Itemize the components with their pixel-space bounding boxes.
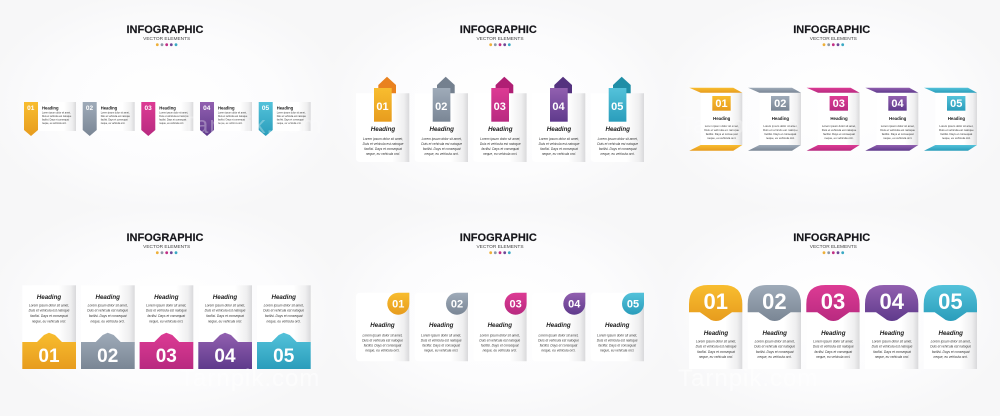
step 03: Heading [488,126,513,133]
step 02: Lorem ipsum dolor sit amet, [101,112,130,114]
step 05: Duis et vehicula est natoque [597,142,638,146]
step 05: neque, eu vehicula orci. [934,355,968,359]
step 04: neque, eu vehicula orci. [875,355,909,359]
watermarks: Tarnpik.com [680,112,820,139]
step 04: Duis et vehicula est natoque [218,115,248,118]
step 02: neque, eu vehicula orci. [101,122,126,125]
step 03: Lorem ipsum dolor sit amet, [146,304,187,308]
panel 1 title [126,24,204,46]
step 03: facilisi. Days et consequat [481,344,520,348]
step 03: facilisi. Days et consequat [159,118,187,122]
step 02: 02 [451,298,463,310]
watermarks: Tarnpik.com [180,365,320,392]
step 03: facilisi. Days et consequat [823,132,855,136]
step 04: facilisi. Days et consequat [540,147,579,151]
step 03: facilisi. Days et consequat [482,147,520,151]
step 04: 04 [552,101,565,113]
step 02 [415,293,468,361]
step 01: Duis et vehicula est natoque [704,128,739,132]
step 03: Duis et vehicula est natoque [813,344,854,348]
step 04: Heading [880,330,904,337]
step 01: facilisi. Days et consequat [706,132,738,136]
step 01: Lorem ipsum dolor sit amet, [362,334,403,338]
step 02: 02 [86,105,93,112]
step 04: facilisi. Days et consequat [206,314,245,318]
step 01: neque, eu vehicula orci. [366,152,400,156]
step 05: Heading [948,116,965,121]
step 04: neque, eu vehicula orci. [541,348,576,352]
step 05: facilisi. Days et consequat [932,350,971,354]
step 05 [257,285,311,369]
step 05 [591,77,644,162]
step 03: Lorem ipsum dolor sit amet, [159,112,188,114]
step 03: facilisi. Days et consequat [148,314,186,318]
step 03: Lorem ipsum dolor sit amet, [822,124,856,128]
step 05: 05 [611,101,623,113]
step 02 [83,102,135,136]
step 03: 03 [833,98,845,110]
step 02: facilisi. Days et consequat [423,147,462,151]
step 04: Heading [546,322,571,329]
step 04: Lorem ipsum dolor sit amet, [539,137,579,141]
step 03: 03 [821,289,845,314]
step 02: Duis et vehicula est natoque [421,142,462,146]
step 03: neque, eu vehicula orci. [149,319,184,323]
step 01 [356,77,409,162]
step 04: facilisi. Days et consequat [882,132,914,136]
watermarks [180,112,820,392]
step 05: facilisi. Days et consequat [277,118,304,122]
step 03 [473,293,527,361]
step 01: Lorem ipsum dolor sit amet, [696,340,736,344]
step 05: Heading [938,330,963,337]
step 01: neque, eu vehicula orci. [699,355,733,359]
step 04: Heading [213,294,237,301]
step 01: Lorem ipsum dolor sit amet, [705,124,739,128]
step 01: Heading [704,330,728,337]
step 03: Duis et vehicula est natoque [146,309,187,313]
step 02: Lorem ipsum dolor sit amet, [88,304,128,308]
step 03: 03 [509,298,522,310]
step 01 [24,102,76,136]
step 05: Lorem ipsum dolor sit amet, [597,334,637,338]
step 05: Heading [277,106,294,110]
step 03: 03 [144,105,152,112]
step 01: Heading [371,126,395,133]
step 01: facilisi. Days et consequat [364,344,402,348]
step 05: Heading [605,126,630,133]
step 02: Duis et vehicula est natoque [421,338,462,342]
step 01: 01 [703,289,728,314]
step 02: Heading [429,322,454,329]
step 01: Heading [713,116,731,121]
panel 5 title: INFOGRAPHIC [460,232,537,244]
step 03: neque, eu vehicula orci. [816,355,851,359]
panel: corner teardrops [356,232,644,361]
step 03: Heading [830,116,848,121]
step 04: 04 [879,289,905,314]
step 05: facilisi. Days et consequat [941,132,973,136]
step 03: Lorem ipsum dolor sit amet, [813,340,854,344]
step 02: Heading [762,330,787,337]
step 05 [259,102,311,136]
step 02: Heading [101,106,118,110]
step 05: facilisi. Days et consequat [598,344,637,348]
step 03: Duis et vehicula est natoque [159,115,189,118]
step 05: Duis et vehicula est natoque [597,338,638,342]
step 01: Lorem ipsum dolor sit amet, [42,112,71,114]
step 05: neque, eu vehicula orci. [267,319,301,323]
step 01: 01 [376,101,389,113]
step 03: 03 [494,101,506,113]
step 04: 04 [214,346,236,367]
step 02 [415,77,468,162]
panel 2 title: VECTOR ELEMENTS [476,36,524,42]
step 05: Heading [605,322,630,329]
step 03: Heading [159,106,176,110]
step 04: Lorem ipsum dolor sit amet, [205,304,245,308]
step 01: facilisi. Days et consequat [364,147,403,151]
step 05: Duis et vehicula est natoque [277,115,307,118]
step 02: neque, eu vehicula orci. [758,355,792,359]
step 04: facilisi. Days et consequat [540,344,578,348]
step 05: Lorem ipsum dolor sit amet, [264,304,304,308]
step 04: Duis et vehicula est natoque [880,128,915,132]
panel: arrow tabs [356,24,644,162]
step 05: 05 [627,298,639,310]
step 04: Lorem ipsum dolor sit amet, [872,340,912,344]
step 01: 01 [27,105,35,112]
step 05: 05 [938,289,963,314]
panel: domed headers [689,232,977,369]
step 05 [924,88,977,151]
step 03 [473,77,527,162]
step 02: 02 [97,346,118,367]
step 01: facilisi. Days et consequat [30,314,69,318]
step 05: Duis et vehicula est natoque [939,128,974,132]
step 01: facilisi. Days et consequat [42,118,69,122]
step 03: Lorem ipsum dolor sit amet, [480,137,521,141]
step 02: neque, eu vehicula orci. [424,348,458,352]
step 01: Lorem ipsum dolor sit amet, [29,304,69,308]
panel: bookmark tabs [24,24,311,136]
step 02: Duis et vehicula est natoque [754,344,795,348]
step 04: Lorem ipsum dolor sit amet, [218,112,247,114]
step 02: facilisi. Days et consequat [756,350,795,354]
step 04: Duis et vehicula est natoque [872,344,913,348]
step 04: Lorem ipsum dolor sit amet, [881,124,915,128]
step 02: Duis et vehicula est natoque [101,115,131,118]
step 05: Duis et vehicula est natoque [263,309,304,313]
step 05: Duis et vehicula est natoque [930,344,971,348]
step 03: neque, eu vehicula orci. [483,348,517,352]
step 04: Duis et vehicula est natoque [538,338,579,342]
panel 5 title: VECTOR ELEMENTS [476,244,524,250]
step 02: Lorem ipsum dolor sit amet, [422,137,462,141]
panel 2 title [460,24,537,46]
step 03: neque, eu vehicula orci. [483,152,518,156]
step 02: 02 [435,101,447,113]
step 03 [807,88,860,151]
step 05: Lorem ipsum dolor sit amet, [939,124,974,128]
step 03: Lorem ipsum dolor sit amet, [480,334,520,338]
step 05: neque, eu vehicula orci. [277,122,302,125]
step 01: Duis et vehicula est natoque [362,338,403,342]
step 04: Heading [547,126,571,133]
step 04 [198,285,252,369]
step 05: Lorem ipsum dolor sit amet, [931,340,971,344]
step 02: 02 [774,98,786,110]
step 05: 05 [950,98,962,110]
step 05: Lorem ipsum dolor sit amet, [598,137,638,141]
step 02: Lorem ipsum dolor sit amet, [421,334,461,338]
panel 1 title: VECTOR ELEMENTS [143,36,190,42]
step 01: 01 [392,298,404,310]
step 05: neque, eu vehicula orci. [601,152,635,156]
step 02: Heading [429,126,454,133]
panel 3 title: VECTOR ELEMENTS [810,36,857,42]
step 02: 02 [762,289,787,314]
step 01 [689,285,742,369]
step 03: Duis et vehicula est natoque [479,338,520,342]
step 03: Heading [154,294,179,301]
step 01 [689,88,742,151]
step 04: facilisi. Days et consequat [873,350,912,354]
step 04: neque, eu vehicula orci. [883,136,912,140]
step 04: Heading [889,116,907,121]
panel 6 title [793,232,870,254]
step 01: Duis et vehicula est natoque [42,115,72,118]
step 04 [532,77,585,162]
step 04: neque, eu vehicula orci. [218,122,243,125]
step 01: neque, eu vehicula orci. [42,122,67,125]
step 01: Heading [37,294,61,301]
panel: 3D boxes [689,24,977,151]
step 04 [865,88,918,151]
step 03 [141,102,193,136]
step 04: facilisi. Days et consequat [218,118,245,122]
step 01: 01 [715,98,728,110]
step 03: Heading [488,322,512,329]
step 03: Heading [821,330,846,337]
step 02: Lorem ipsum dolor sit amet, [755,340,795,344]
panel 1 title: INFOGRAPHIC [126,24,204,36]
step 01 [22,285,76,369]
step 04: neque, eu vehicula orci. [208,319,242,323]
step 05: neque, eu vehicula orci. [600,348,634,352]
step 01: Duis et vehicula est natoque [696,344,737,348]
step 02: neque, eu vehicula orci. [425,152,459,156]
step 03: facilisi. Days et consequat [815,350,853,354]
watermarks: Tarnpik.com [678,365,818,392]
step 05: Heading [271,294,296,301]
panel 6 title: INFOGRAPHIC [793,232,870,244]
step 04: Duis et vehicula est natoque [205,309,246,313]
watermarks: Tarnpik.com [182,112,322,139]
step 03: Duis et vehicula est natoque [480,142,521,146]
step 02: Lorem ipsum dolor sit amet, [763,124,798,128]
step 02: Heading [772,116,789,121]
step 01: neque, eu vehicula orci. [707,136,736,140]
step 02: facilisi. Days et consequat [765,132,797,136]
step 01: Heading [370,322,395,329]
step 01: Duis et vehicula est natoque [363,142,404,146]
step 05 [924,285,977,369]
step 02: neque, eu vehicula orci. [766,136,795,140]
step 03: 03 [156,346,177,367]
step 05: facilisi. Days et consequat [265,314,304,318]
step 03 [140,285,193,369]
panel 4 title: INFOGRAPHIC [126,232,204,244]
step 05: 05 [273,346,295,367]
step 01: Lorem ipsum dolor sit amet, [363,137,403,141]
step 02: Duis et vehicula est natoque [87,309,128,313]
step 01: neque, eu vehicula orci. [32,319,66,323]
step 02 [748,285,801,369]
step 04 [200,102,252,136]
step 05: facilisi. Days et consequat [599,147,638,151]
step 01: 01 [38,346,60,367]
step 04 [532,293,585,361]
panel 3 title [793,24,870,46]
step 02: facilisi. Days et consequat [89,314,128,318]
step 04: 04 [203,105,211,112]
step 01: facilisi. Days et consequat [697,350,736,354]
step 04 [865,285,918,369]
panel: bottom number blocks [22,232,311,369]
step 04: 04 [568,298,581,310]
step 03: Duis et vehicula est natoque [822,128,857,132]
step 02 [748,88,801,151]
step 05 [591,293,644,361]
step 02: Heading [95,294,120,301]
step 05: Lorem ipsum dolor sit amet, [277,112,306,114]
step 03: neque, eu vehicula orci. [159,122,184,125]
step 02: facilisi. Days et consequat [101,118,128,122]
step 02: neque, eu vehicula orci. [91,319,125,323]
panel 4 title [126,232,204,254]
step 02: facilisi. Days et consequat [422,344,461,348]
step 02: Duis et vehicula est natoque [763,128,798,132]
step 01: Heading [42,106,59,110]
step 04: Lorem ipsum dolor sit amet, [538,334,579,338]
panel 4 title: VECTOR ELEMENTS [143,244,190,250]
step 01: neque, eu vehicula orci. [365,348,400,352]
panel 5 title [460,232,537,254]
step 04: Heading [218,106,235,110]
step 05: 05 [262,105,269,112]
step 04: 04 [891,98,904,110]
step 01: Duis et vehicula est natoque [29,309,70,313]
step 05: neque, eu vehicula orci. [942,136,971,140]
panel 2 title: INFOGRAPHIC [460,24,537,36]
step 04: Duis et vehicula est natoque [539,142,580,146]
step 03: neque, eu vehicula orci. [824,136,854,140]
step 04: neque, eu vehicula orci. [542,152,576,156]
step 01 [356,293,409,361]
panel 6 title: VECTOR ELEMENTS [810,244,857,250]
panel 3 title: INFOGRAPHIC [793,24,870,36]
step 03 [806,285,860,369]
step 02 [81,285,135,369]
